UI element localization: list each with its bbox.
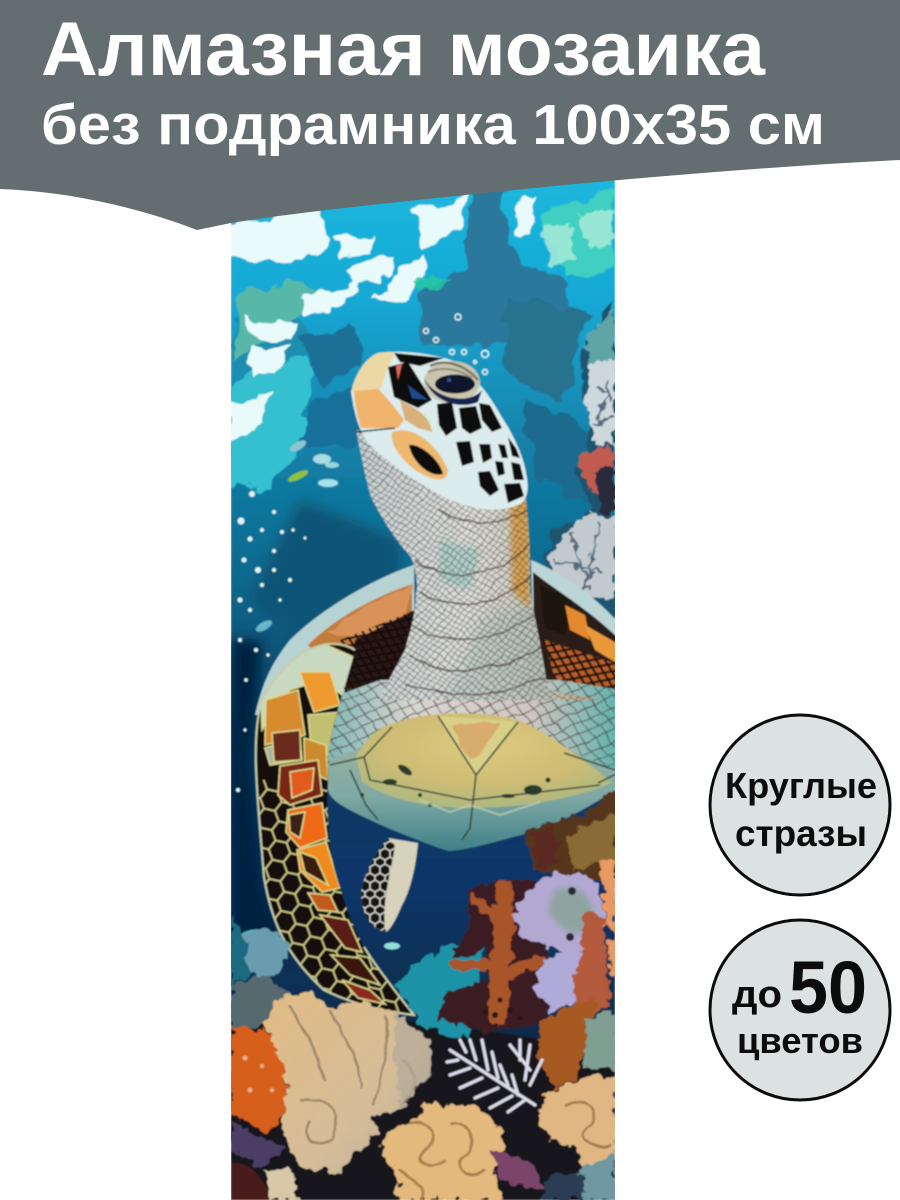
left anemone	[238, 929, 288, 977]
hind flipper	[361, 838, 418, 932]
white fan coral	[447, 1040, 542, 1112]
badge: up to 50 colours: цветов	[737, 1020, 863, 1061]
red-brown coral	[435, 880, 548, 1032]
right peach coral	[537, 1075, 615, 1180]
orange right coral	[572, 912, 610, 1020]
header banner	[0, 0, 900, 230]
bottom details	[231, 1163, 272, 1200]
eye	[424, 361, 480, 403]
badge: up to 50 colours: до	[732, 974, 782, 1016]
underwater background	[231, 180, 615, 1040]
black head markings	[388, 353, 524, 503]
right side coral on reef wall	[544, 300, 615, 620]
orange-left coral	[231, 1025, 288, 1133]
purple coral	[515, 872, 603, 956]
beak	[354, 389, 404, 428]
badge: round rhinestones: стразы	[735, 813, 867, 854]
big peach coral	[264, 993, 431, 1173]
cheek marking	[392, 430, 448, 479]
badge: round rhinestones	[710, 715, 890, 895]
neck	[355, 429, 598, 701]
dark reef base	[231, 1020, 615, 1200]
shell shoulders	[255, 560, 620, 715]
badge: round rhinestones: Круглые	[725, 765, 877, 806]
badge: up to 50 colours	[710, 920, 890, 1100]
small fish and bubbles	[236, 314, 488, 950]
head	[351, 352, 528, 510]
front flipper	[250, 630, 420, 1020]
badge: up to 50 colours: 50	[789, 946, 867, 1029]
neck skin above the belly shell	[325, 680, 620, 778]
lower peach coral	[380, 1100, 503, 1200]
title: Алмазная мозаика	[41, 7, 766, 92]
illustration: sea turtle painting	[225, 170, 620, 1200]
teal coral	[395, 940, 482, 1040]
belly shell	[328, 713, 620, 851]
reef corals	[231, 790, 620, 1200]
upper-right brown coral	[525, 790, 620, 880]
subtitle: без подрамника 100х35 см	[41, 93, 825, 157]
